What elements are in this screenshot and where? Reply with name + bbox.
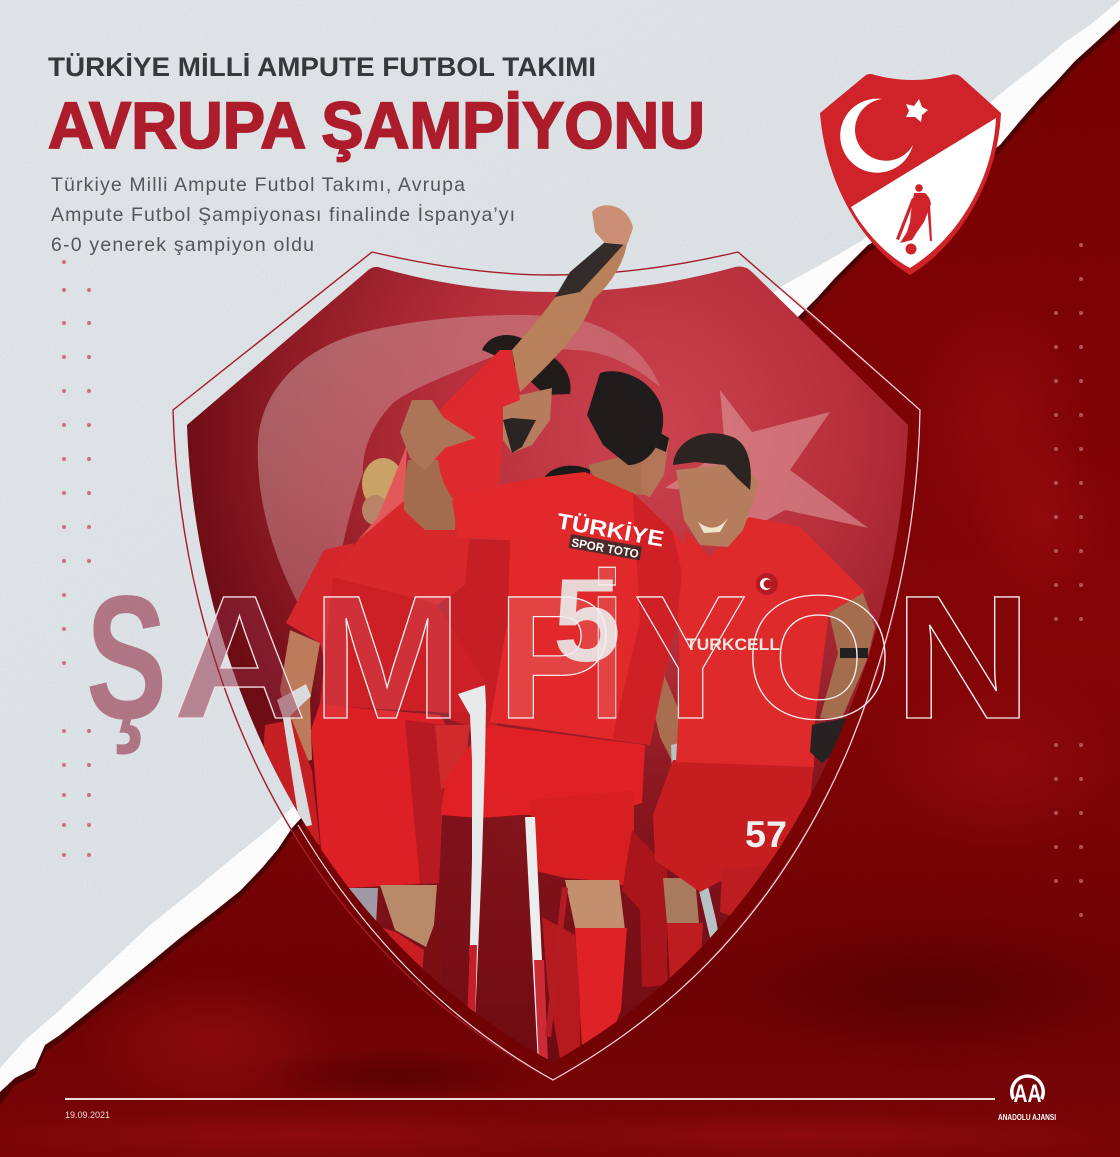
- background texture: crowd and mottling: [0, 290, 1120, 1157]
- player: back left: [262, 458, 404, 845]
- date: 19.09.2021: [65, 1110, 110, 1120]
- large word: ŞAMPİYON: Y: [634, 560, 747, 756]
- heading block: [48, 52, 705, 256]
- large word: ŞAMPİYON: O: [745, 560, 893, 756]
- raised arm with tattoo and fist: [512, 205, 633, 392]
- shield: lower outline in white over dark: [298, 745, 850, 1080]
- dot pattern: right columns: [1054, 243, 1083, 917]
- description paragraph: Ampute Futbol Şampiyonası finalinde İspanya’yı: [51, 203, 515, 226]
- crutches: white and striped: [458, 685, 720, 1064]
- shield: outer outline: [173, 252, 920, 1080]
- player: number 57: [653, 433, 875, 918]
- subtitle heading: TÜRKİYE MİLLİ AMPUTE FUTBOL TAKIMI: [48, 52, 596, 82]
- large word: ŞAMPİYON: P: [497, 560, 612, 756]
- flag: star: [665, 390, 868, 535]
- shorts number 57: 57: [745, 814, 787, 855]
- large word: ŞAMPİYON: A: [172, 560, 307, 756]
- emblem: amputee football federation crest: [820, 74, 1001, 275]
- description paragraph: [51, 174, 515, 256]
- description paragraph: 6-0 yenerek şampiyon oldu: [51, 234, 314, 256]
- logo: Anadolu Ajansı: AA: [1014, 1080, 1042, 1108]
- player: hidden middle: [442, 430, 669, 735]
- shield: inner flag panel with photo: [180, 260, 920, 1070]
- dot pattern: left columns: [62, 260, 91, 857]
- jersey sponsor text: TURKCELL: [686, 635, 780, 654]
- player: number 5: [400, 371, 703, 1058]
- large word: ŞAMPİYON: İ: [590, 560, 624, 756]
- player: lifted (body): [311, 335, 571, 1000]
- main title: AVRUPA ŞAMPİYONU: [48, 88, 705, 162]
- large word: ŞAMPİYON: [86, 560, 1032, 756]
- large word: ŞAMPİYON: M: [312, 560, 462, 756]
- jersey number 5: 5: [553, 555, 621, 687]
- large word: ŞAMPİYON: N: [894, 560, 1032, 756]
- logo: Anadolu Ajansı: ANADOLU AJANSI: [998, 1112, 1056, 1122]
- footer rule: [65, 1098, 995, 1100]
- crutch: far left: [277, 684, 312, 828]
- large word: ŞAMPİYON: Ş: [86, 560, 167, 756]
- jersey crest: [756, 573, 778, 595]
- jersey sponsor: SPOR TOTO: [570, 535, 640, 561]
- shield: right upper outline in white: [790, 295, 920, 745]
- jersey name: TÜRKİYE: [555, 508, 666, 552]
- description paragraph: Türkiye Milli Ampute Futbol Takımı, Avrupa: [51, 174, 465, 196]
- logo: Anadolu Ajansı: [998, 1074, 1056, 1122]
- flag: crescent: [258, 314, 660, 602]
